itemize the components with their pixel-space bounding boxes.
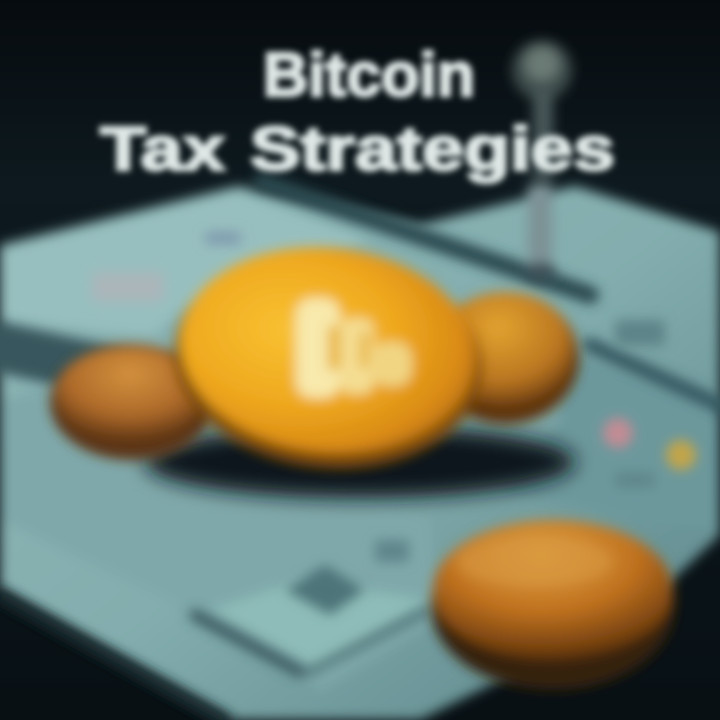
icon: main bitcoin coin: [164, 233, 492, 484]
form field: upper left: [92, 272, 164, 302]
upper-left sheet tone: [0, 192, 370, 335]
form field: small rows: [615, 472, 655, 488]
title: Bitcoin: [263, 41, 475, 110]
title: Tax: [100, 115, 226, 184]
bitcoin symbol: [296, 298, 412, 398]
icon: left coin: [50, 344, 214, 460]
form field: top mark: [205, 232, 241, 244]
form field: small square: [375, 540, 409, 562]
bright lower sheet: [210, 580, 430, 670]
lower sheet tone: [0, 385, 440, 690]
icon: pin stem: [512, 40, 572, 282]
form field: right box: [615, 320, 665, 346]
title: Strategies: [250, 115, 615, 184]
status dot: yellow: [666, 440, 696, 470]
form details: [92, 232, 696, 615]
dark grooves on the panel: [0, 182, 720, 720]
title: [100, 41, 615, 184]
status dot: pink: [603, 418, 633, 448]
icon: front coin: [431, 520, 675, 690]
form field: lower button: [285, 565, 365, 615]
right sheet tone: [500, 350, 720, 530]
shadow: main coin: [145, 426, 575, 498]
panel: tax document surface: [0, 186, 720, 720]
icon: right coin: [431, 292, 579, 424]
